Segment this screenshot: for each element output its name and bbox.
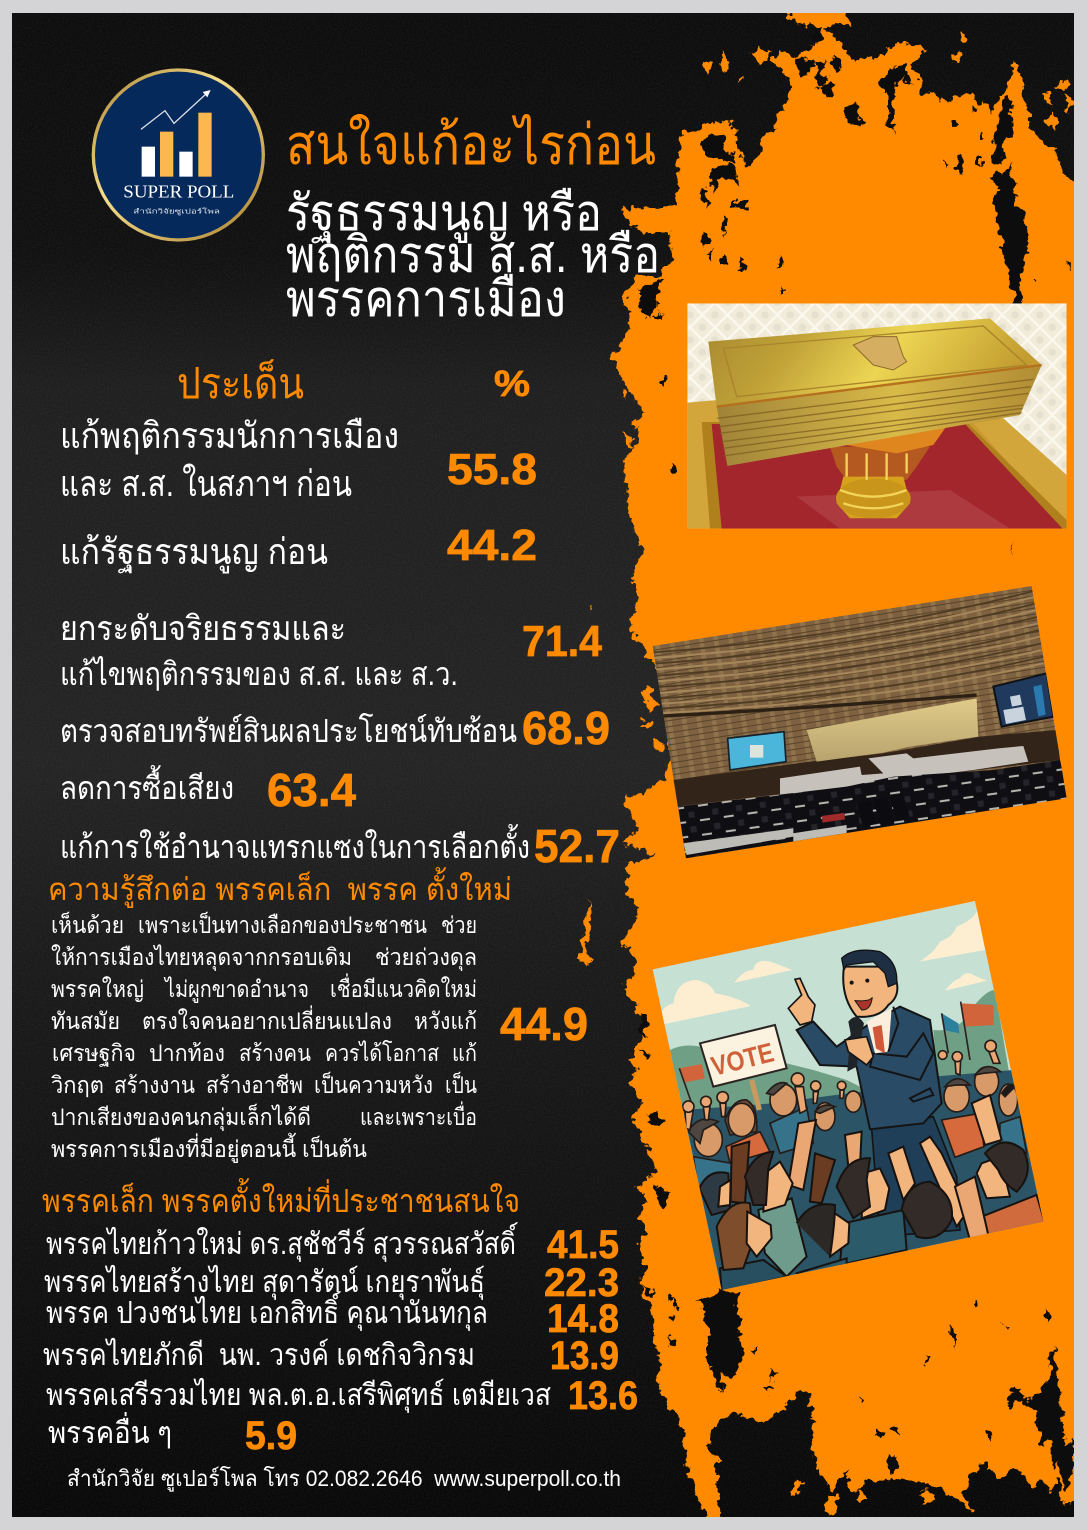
- orange flecks on the dark area: [579, 5, 1074, 1517]
- dais: [780, 746, 1028, 796]
- paragraph: reasons for agreeing: สร้างคน: [239, 1040, 311, 1066]
- man in green shirt: [758, 1198, 807, 1277]
- paragraph: reasons for agreeing: เศรษฐกิจ: [52, 1040, 136, 1067]
- paragraph: reasons for agreeing: ช่วยถ่วงดุล: [375, 944, 477, 971]
- result: election interference: 52.7: [534, 820, 620, 872]
- tree line: [670, 990, 1017, 1170]
- paragraph: reasons for agreeing: เชื่อมีแนวคิดใหม่: [330, 973, 477, 1002]
- result: fix behaviour first: และ ส.ส. ในสภาฯ ก่อน: [60, 463, 352, 504]
- table header: percent: %: [494, 363, 530, 404]
- result: audit assets: [60, 702, 610, 754]
- result: fix behaviour first: แก้พฤติกรรมนักการเมือง: [60, 415, 399, 456]
- paragraph: reasons for agreeing: เป็นความหวัง: [314, 1070, 433, 1098]
- back row of supporters: [688, 1067, 1027, 1190]
- logo: Super Poll badge: [92, 68, 265, 242]
- row: Puangchon Thai: พรรค ปวงชนไทย เอกสิทธิ์ คุณานันทกุล: [46, 1291, 488, 1332]
- row: Thai Kao Mai: 41.5: [547, 1223, 619, 1267]
- row: Seri Ruam Thai: 13.6: [568, 1374, 638, 1418]
- result: reduce vote buying: [60, 764, 356, 816]
- paragraph: reasons for agreeing: แก้: [452, 1040, 477, 1066]
- paragraph: reasons for agreeing: ทันสมัย: [51, 1008, 120, 1034]
- subtitle: [286, 185, 660, 327]
- result: raise ethics: ยกระดับจริยธรรมและ: [60, 610, 346, 648]
- subtitle: พรรคการเมือง: [286, 271, 566, 327]
- result: raise ethics: แก้ไขพฤติกรรมของ ส.ส. และ ส.ว.: [60, 656, 458, 692]
- dark gaps inside the splash: [638, 25, 1074, 1490]
- left screen: [728, 732, 786, 770]
- title: สนใจแก้อะไรก่อน: [286, 113, 656, 176]
- footer contact line: สำนักวิจัย ซูเปอร์โพล โทร 02.082.2646 www.superpoll.co.th: [67, 1466, 621, 1492]
- party list with percentages: [43, 1222, 638, 1458]
- back wall: [807, 698, 978, 762]
- clouds: [660, 910, 987, 1025]
- row: other parties: 5.9: [245, 1414, 297, 1458]
- flags: [679, 1003, 994, 1083]
- paragraph: reasons for agreeing: ไม่ผูกขาดอำนาจ: [163, 976, 309, 1003]
- heading: feelings about small parties: ความรู้สึกต่อ พรรคเล็ก พรรค ตั้งใหม่: [48, 867, 512, 908]
- result: fix behaviour first: [60, 415, 537, 504]
- vote sign: VOTE: [708, 1036, 777, 1082]
- value: agree share: 44.9: [500, 998, 588, 1050]
- result: fix constitution first: แก้รัฐธรรมนูญ ก่อน: [60, 531, 328, 574]
- paragraph: reasons for agreeing: [51, 910, 477, 1163]
- logo subtitle: สำนักวิจัยซูเปอร์โพล: [133, 207, 220, 215]
- paragraph: reasons for agreeing: พรรคใหญ่: [51, 976, 144, 1002]
- result: election interference: [60, 820, 620, 872]
- row: Thai Sang Thai: 22.3: [544, 1261, 619, 1305]
- seats: [678, 760, 1070, 860]
- result: raise ethics: 71.4: [522, 617, 602, 666]
- curved ceiling: [650, 597, 1043, 713]
- man centre: [840, 1210, 907, 1265]
- microphone: [847, 1017, 864, 1072]
- row: Thai Pakdee: 13.9: [550, 1334, 619, 1378]
- woman with brown hair: [720, 1260, 787, 1292]
- result: audit assets: 68.9: [522, 702, 610, 754]
- paragraph: reasons for agreeing: หวังแก้: [414, 1008, 477, 1034]
- photo: parliament chamber: [652, 586, 1066, 858]
- paragraph: reasons for agreeing: พรรคการเมืองที่มีอยู่ตอนนี้ เป็นต้น: [51, 1133, 367, 1163]
- candidate: [788, 950, 960, 1237]
- result: raise ethics: [60, 610, 602, 692]
- raised fists, back: [683, 1040, 1000, 1130]
- paragraph: reasons for agreeing: และเพราะเบื่อ: [360, 1101, 477, 1130]
- photo: gold constitution book on a stand: [687, 303, 1067, 529]
- subtitle: พฤติกรรม ส.ส. หรือ: [286, 227, 660, 283]
- subtitle: รัฐธรรมนูญ หรือ: [286, 185, 602, 243]
- result: fix constitution first: [60, 521, 537, 574]
- paragraph: reasons for agreeing: ให้การเมืองไทยหลุดจากกรอบเดิม: [51, 944, 352, 971]
- row: Thai Kao Mai: พรรคไทยก้าวใหม่ ดร.สุชัชวีร์ สุวรรณสวัสดิ์: [46, 1222, 518, 1263]
- result: fix behaviour first: 55.8: [447, 445, 537, 494]
- result: reduce vote buying: ลดการซื้อเสียง: [60, 765, 234, 806]
- heading: parties of interest: พรรคเล็ก พรรคตั้งใหม่ที่ประชาชนสนใจ: [42, 1178, 520, 1219]
- paragraph: reasons for agreeing: ควรได้โอกาส: [325, 1040, 439, 1066]
- paragraph: reasons for agreeing: เพราะเป็นทางเลือกของประชาชน: [138, 910, 427, 938]
- paragraph: reasons for agreeing: ช่วย: [441, 912, 477, 938]
- result: election interference: แก้การใช้อำนาจแทรกแซงในการเลือกตั้ง: [60, 824, 530, 865]
- logo wordmark: SUPER POLL: [123, 182, 234, 202]
- row: Puangchon Thai: [46, 1291, 619, 1341]
- row: Thai Pakdee: [43, 1334, 619, 1378]
- man, lower centre: [796, 1257, 848, 1274]
- paragraph: reasons for agreeing: วิกฤต: [51, 1072, 104, 1098]
- icon: bar chart with rising arrow: [141, 90, 212, 177]
- paragraph: reasons for agreeing: ปากเสียงของคนกลุ่มเล็กได้ดี: [51, 1102, 311, 1131]
- orange paint splash: [579, 5, 1088, 1530]
- row: Seri Ruam Thai: พรรคเสรีรวมไทย พล.ต.อ.เสรีพิศุทธ์ เตมียเวส: [46, 1377, 551, 1414]
- crowd base: [683, 1070, 1047, 1293]
- row: other parties: พรรคอื่น ๆ: [48, 1412, 172, 1450]
- row: Puangchon Thai: 14.8: [547, 1297, 619, 1341]
- table header: issue: ประเด็น: [177, 359, 304, 407]
- paragraph: reasons for agreeing: เห็นด้วย: [51, 910, 124, 938]
- right man: [970, 1195, 1045, 1240]
- row: other parties: [48, 1412, 297, 1458]
- pointing hand: [788, 978, 815, 1025]
- paragraph: reasons for agreeing: ตรงใจคนอยากเปลี่ยนแปลง: [142, 1005, 392, 1034]
- paragraph: reasons for agreeing: ปากท้อง: [149, 1040, 225, 1066]
- woman in orange at right: [888, 1095, 1002, 1227]
- paragraph: reasons for agreeing: สร้างอาชีพ: [206, 1072, 303, 1098]
- row: Thai Sang Thai: พรรคไทยสร้างไทย สุดารัตน์ เกยุราพันธุ์: [44, 1264, 485, 1301]
- result: fix constitution first: 44.2: [447, 521, 537, 570]
- result: reduce vote buying: 63.4: [267, 764, 356, 816]
- vote sign: [700, 1025, 787, 1110]
- row: Thai Sang Thai: [44, 1261, 619, 1305]
- head, back view: [902, 1182, 952, 1238]
- paragraph: reasons for agreeing: สร้างงาน: [114, 1072, 195, 1098]
- row: Thai Pakdee: พรรคไทยภักดี นพ. วรงค์ เดชกิจวิกรม: [43, 1337, 475, 1372]
- right screen: [993, 673, 1053, 727]
- result: audit assets: ตรวจสอบทรัพย์สินผลประโยชน์ทับซ้อน: [60, 713, 517, 749]
- illustration: candidate speaking to a crowd: [652, 901, 1044, 1290]
- foreground crowd: [699, 1095, 1045, 1292]
- paragraph: reasons for agreeing: เป็น: [445, 1070, 477, 1098]
